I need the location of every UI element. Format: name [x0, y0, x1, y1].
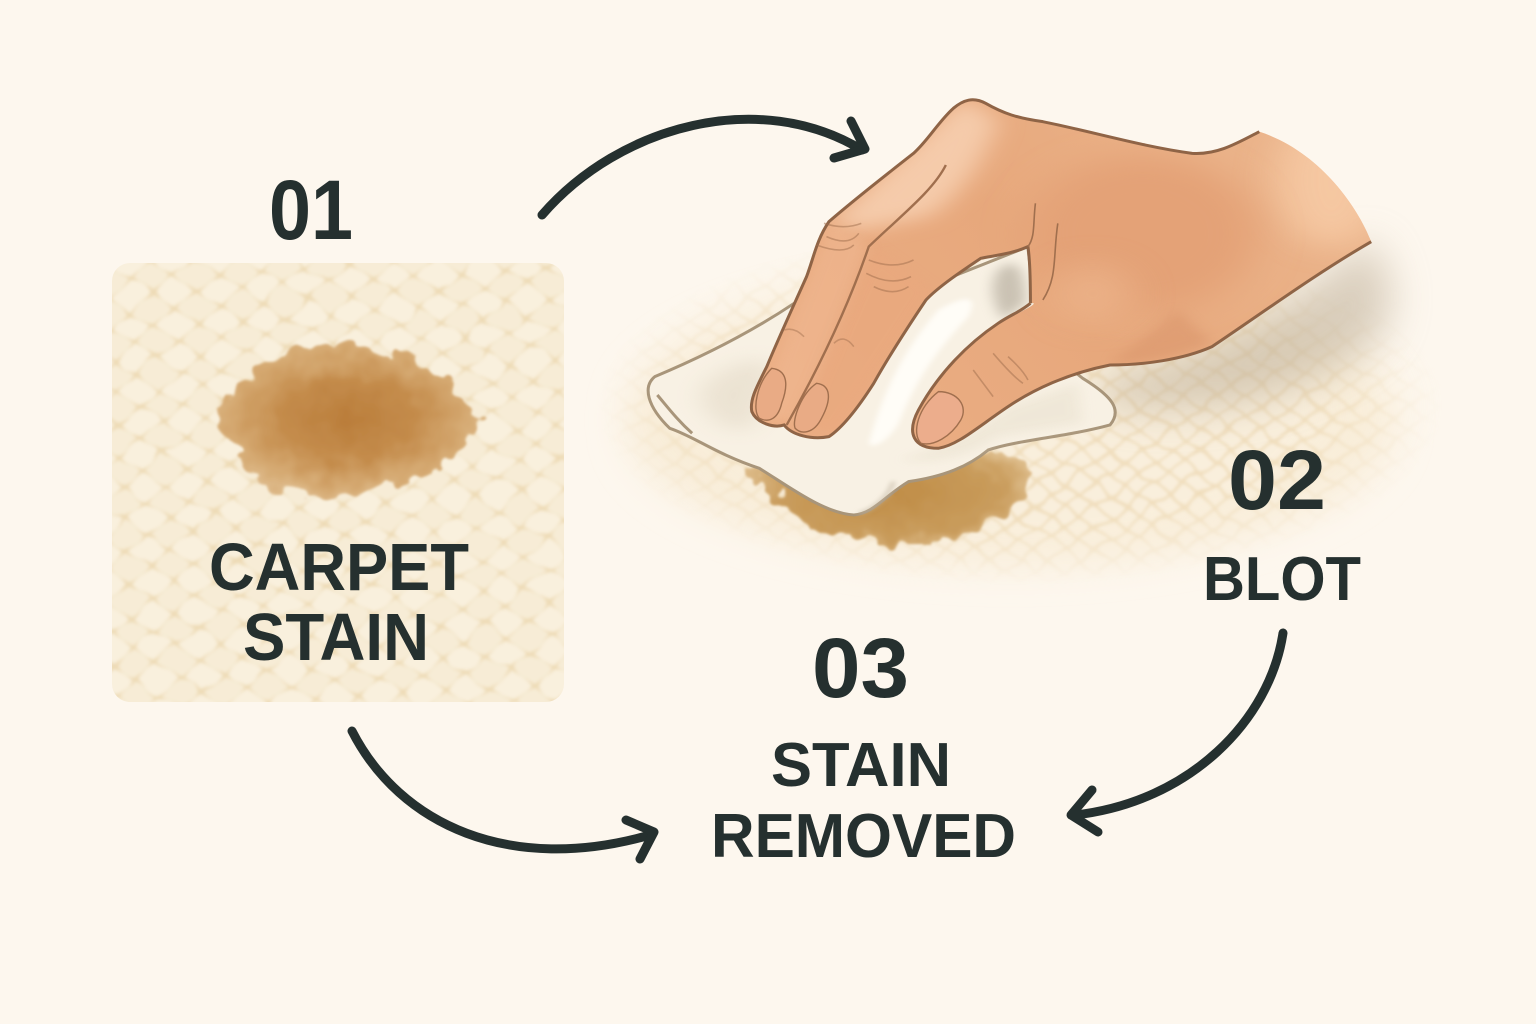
step 03: stain removed: 03 [812, 621, 909, 715]
hand outline [751, 100, 1259, 438]
hand [751, 97, 1386, 448]
step 02: blot [1203, 433, 1361, 614]
finger separation and creases [784, 165, 1058, 425]
cloth [648, 247, 1115, 515]
stain blot [216, 347, 480, 496]
hand and cloth illustration [648, 97, 1386, 515]
residual stain under tissue [750, 447, 1033, 543]
heading: carpet stain [209, 530, 469, 675]
carpet patch under hand [614, 236, 1414, 579]
arrow: step 1 to step 2 [542, 119, 865, 215]
arrow: step 1 to step 3 [352, 731, 654, 859]
carpet swatch [112, 263, 564, 702]
fingernails [756, 368, 963, 444]
arrow: step 2 to step 3 [1071, 633, 1283, 832]
heading: carpet stain: STAIN [243, 600, 429, 675]
step 03: stain removed: STAIN [771, 731, 951, 800]
step 03: stain removed: REMOVED [711, 802, 1016, 871]
thumb outline [913, 242, 1371, 448]
soft hand shadow [1100, 240, 1391, 411]
step 02: blot: BLOT [1203, 545, 1361, 614]
step number 01: 01 [269, 163, 353, 257]
step 02: blot: 02 [1228, 433, 1326, 527]
hand shading [754, 97, 1386, 433]
heading: carpet stain: CARPET [209, 530, 469, 605]
step 03: stain removed [711, 621, 1016, 871]
panel: carpet stain [112, 263, 564, 702]
